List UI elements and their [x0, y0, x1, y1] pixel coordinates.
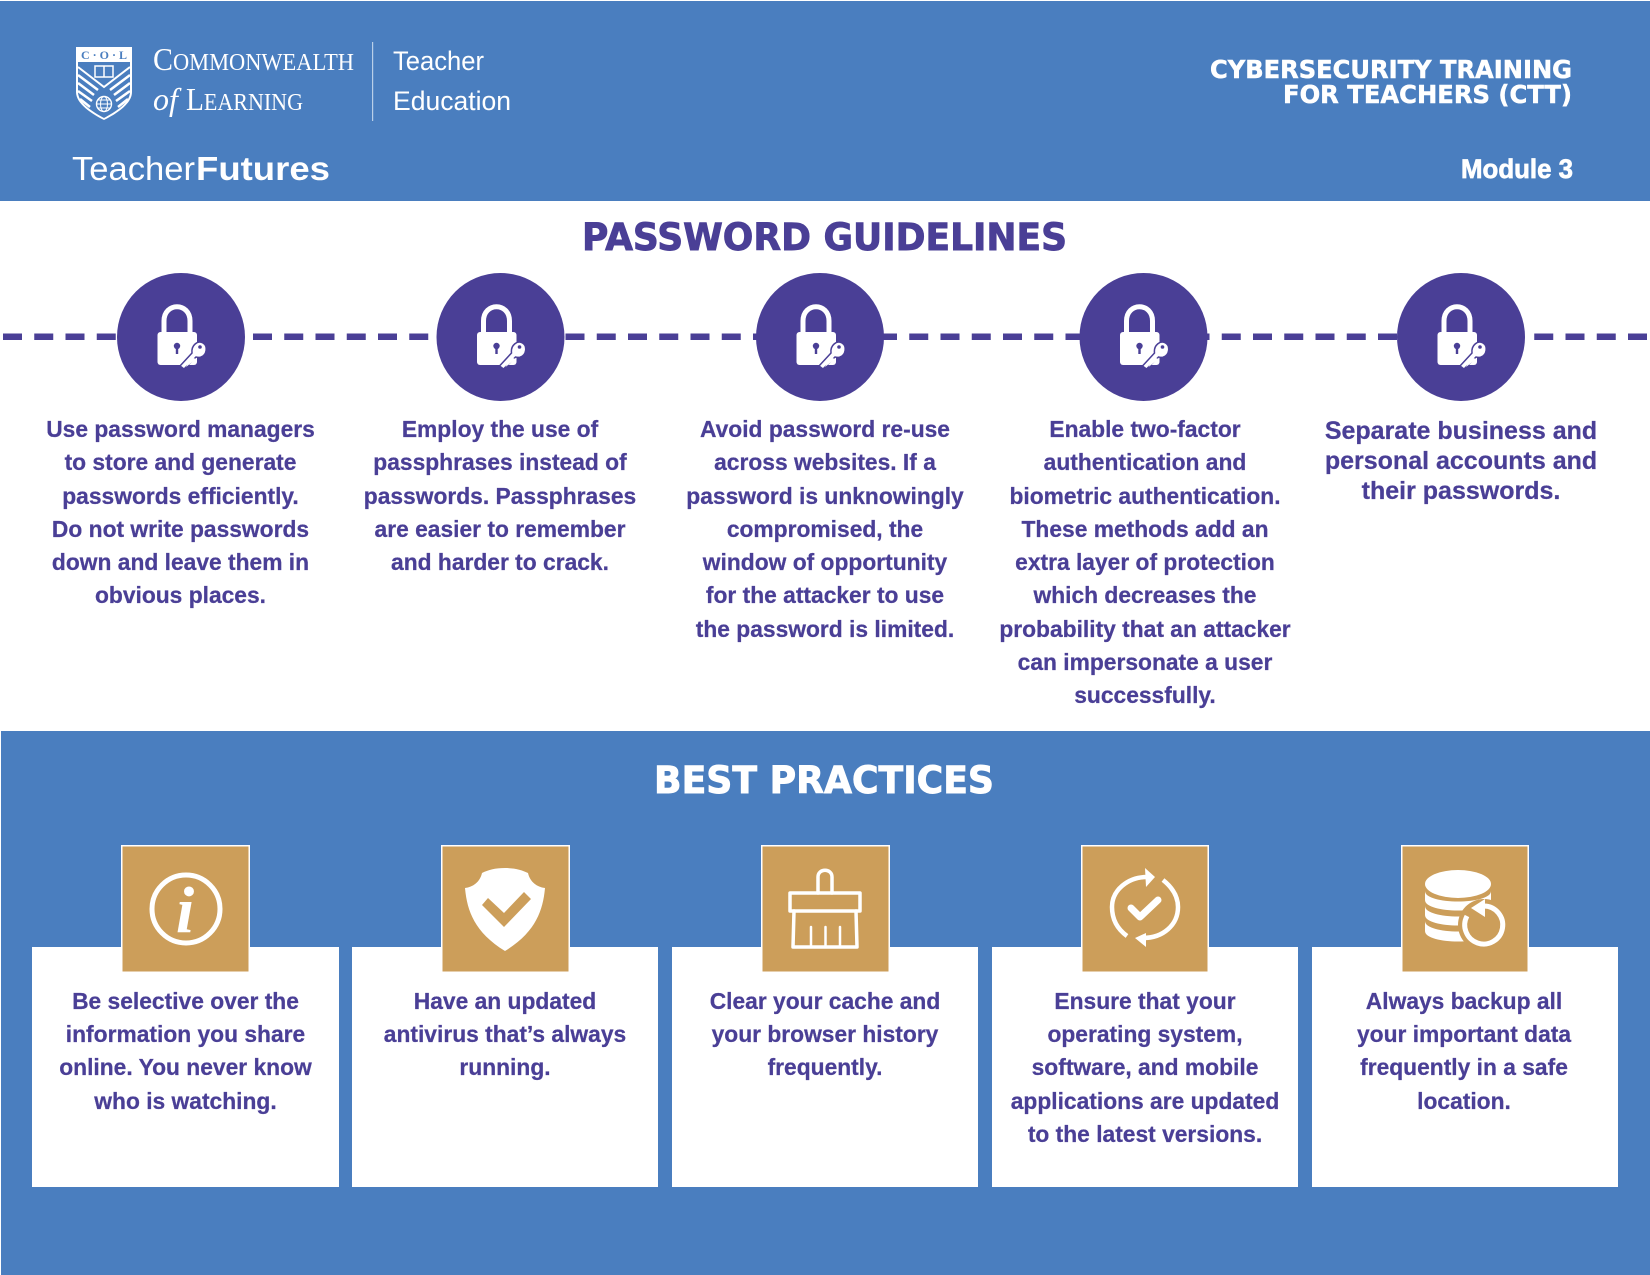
guideline text 2: are easier to remember — [375, 516, 625, 542]
practice text 5: frequently in a safe — [1360, 1054, 1568, 1080]
header title — [1210, 55, 1572, 109]
card 5 — [1312, 947, 1618, 1187]
guideline text 1: passwords efficiently. — [62, 482, 299, 508]
guideline text 2: passphrases instead of — [373, 449, 627, 475]
guideline text 5: Separate business and — [1325, 416, 1597, 444]
practice text 1: Be selective over the — [72, 988, 299, 1014]
guideline text 2: and harder to crack. — [391, 549, 609, 575]
icon tile: information: i — [176, 874, 195, 947]
TeacherFutures wordmark: Futures — [196, 150, 330, 187]
icon tile: antivirus shield — [441, 845, 570, 972]
logo wordmark — [153, 41, 354, 117]
card 2 — [352, 947, 658, 1187]
guideline text 3 — [686, 416, 964, 642]
guideline text 2 — [364, 416, 636, 575]
heading: best practices: BEST PRACTICES — [654, 759, 994, 802]
logo: Teacher Education: Education — [393, 86, 511, 116]
guideline text 4: These methods add an — [1021, 516, 1268, 542]
icon tile: update sync — [1081, 845, 1209, 972]
module label: Module 3 — [1461, 154, 1573, 184]
icon tile: brush — [761, 845, 890, 972]
practice text 3: frequently. — [768, 1054, 882, 1080]
best practices band — [1, 731, 1650, 1275]
guideline text 5 — [1325, 416, 1597, 505]
logo: Teacher Education — [393, 46, 511, 116]
practice text 1: who is watching. — [94, 1088, 277, 1114]
guideline text 4: biometric authentication. — [1009, 482, 1281, 508]
practice text 2: running. — [459, 1054, 551, 1080]
guideline text 4: extra layer of protection — [1015, 549, 1275, 575]
guideline text 1: Use password managers — [46, 416, 315, 442]
guideline text 4: successfully. — [1074, 682, 1216, 708]
practice text 3: Clear your cache and — [710, 988, 940, 1014]
logo divider — [372, 42, 373, 121]
guideline text 3: the password is limited. — [696, 616, 954, 642]
guideline text 4: Enable two-factor — [1049, 416, 1241, 442]
practice text 2 — [384, 988, 626, 1080]
guideline text 1: obvious places. — [95, 582, 266, 608]
guideline text 4: authentication and — [1044, 449, 1246, 475]
logo wordmark: of — [153, 81, 182, 117]
practice text 5: your important data — [1357, 1021, 1571, 1047]
practice text 3 — [710, 988, 940, 1080]
guideline text 1 — [46, 416, 315, 608]
logo: Teacher Education: Teacher — [393, 46, 484, 76]
logo wordmark: COMMONWEALTH — [153, 41, 354, 77]
guideline text 1: down and leave them in — [52, 549, 309, 575]
guideline text 1: Do not write passwords — [52, 516, 309, 542]
guideline text 3: password is unknowingly — [686, 482, 964, 508]
logo: Commonwealth of Learning shield — [76, 47, 132, 120]
header band — [0, 1, 1650, 201]
practice text 4: Ensure that your — [1054, 988, 1236, 1014]
heading: password guidelines: PASSWORD GUIDELINES — [582, 216, 1067, 259]
practice text 1: online. You never know — [59, 1054, 312, 1080]
practice text 5: location. — [1417, 1088, 1511, 1114]
icon tile: data backup — [1401, 845, 1529, 972]
logo: Commonwealth of Learning shield: C·O·L — [81, 48, 127, 62]
practice text 4 — [1011, 988, 1279, 1147]
guideline text 3: window of opportunity — [703, 549, 947, 575]
icon: padlock with key 4 — [1080, 273, 1208, 401]
guideline text 5: their passwords. — [1362, 477, 1560, 505]
guideline text 3: for the attacker to use — [706, 582, 944, 608]
guideline text 4 — [999, 416, 1291, 708]
guideline text 3: compromised, the — [727, 516, 923, 542]
guideline text 2: passwords. Passphrases — [364, 482, 636, 508]
card 4 — [992, 947, 1298, 1187]
guideline text 3: across websites. If a — [714, 449, 936, 475]
guideline text 2: Employ the use of — [402, 416, 598, 442]
icon: padlock with key 5 — [1397, 273, 1525, 401]
practice text 4: to the latest versions. — [1028, 1121, 1262, 1147]
practice text 2: antivirus that’s always — [384, 1021, 626, 1047]
icon: padlock with key 2 — [436, 273, 564, 401]
icon tile: information — [121, 845, 250, 972]
practice text 3: your browser history — [712, 1021, 938, 1047]
guideline text 4: can impersonate a user — [1018, 649, 1272, 675]
practice text 1: information you share — [66, 1021, 305, 1047]
practice text 2: Have an updated — [414, 988, 596, 1014]
TeacherFutures wordmark — [72, 150, 330, 187]
guideline text 4: probability that an attacker — [999, 616, 1291, 642]
header title: FOR TEACHERS (CTT) — [1283, 80, 1572, 109]
guideline text 5: personal accounts and — [1325, 447, 1597, 475]
practice text 4: operating system, — [1047, 1021, 1243, 1047]
guideline text 3: Avoid password re-use — [700, 416, 950, 442]
TeacherFutures wordmark: Teacher — [72, 150, 195, 187]
header title: CYBERSECURITY TRAINING — [1210, 55, 1572, 84]
icon: padlock with key 3 — [756, 273, 884, 401]
logo wordmark: LEARNING — [186, 81, 303, 117]
practice text 4: software, and mobile — [1032, 1054, 1258, 1080]
practice text 4: applications are updated — [1011, 1088, 1279, 1114]
practice text 5: Always backup all — [1366, 988, 1562, 1014]
practice text 1 — [59, 988, 312, 1114]
card 1 — [32, 947, 339, 1187]
card 3 — [672, 947, 978, 1187]
guideline text 1: to store and generate — [65, 449, 296, 475]
guideline text 4: which decreases the — [1033, 582, 1256, 608]
practice text 5 — [1357, 988, 1572, 1114]
icon: padlock with key 1 — [117, 273, 245, 401]
dashed timeline — [3, 334, 1647, 340]
